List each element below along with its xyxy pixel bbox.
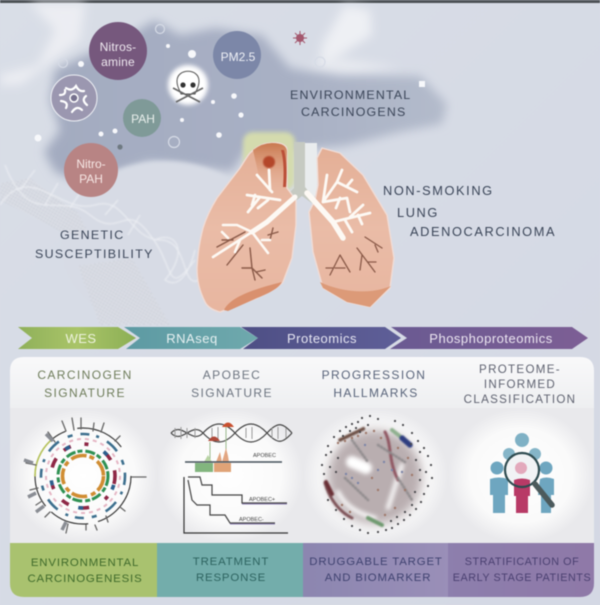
smoke wisps [0,3,400,85]
bronchi: white airways left [213,170,295,257]
dark particle [117,144,123,150]
right lung [307,148,394,307]
red spiky particle [293,31,307,45]
panel: APOBEC signature [157,357,303,597]
label: environmental carcinogenesis: CARCINOGENESIS [27,573,143,585]
heading: non-smoking lung adenocarcinoma: ADENOCARCINOMA [410,224,556,239]
heading: non-smoking lung adenocarcinoma: NON-SMOKING [383,183,494,198]
icon: microbe particle [51,75,97,121]
arrow: RNAseq: RNAseq [166,331,218,346]
heading: carcinogen signature [37,368,133,400]
trachea lumen [305,143,317,198]
heading: proteome-informed classification: CLASSIFICATION [464,393,576,406]
heading: carcinogen signature: SIGNATURE [44,386,126,400]
badge: Nitro-PAH: PAH [79,172,103,186]
heading: environmental carcinogens: CARCINOGENS [301,105,406,119]
label: environmental carcinogenesis [27,557,143,585]
label: druggable target and biomarker [309,556,443,584]
heading: progression hallmarks: PROGRESSION [322,368,426,382]
badge: PM2.5 [213,31,261,79]
heading: genetic susceptibility [35,228,154,261]
chart: survival curves [184,477,288,533]
heading: APOBEC signature [191,368,273,400]
lung lesion glow [243,132,295,190]
DNA double helix [0,165,200,325]
bronchi: brown branches left [217,228,278,280]
arrow: Phosphoproteomics: Phosphoproteomics [429,331,553,346]
top edge line [0,0,600,3]
heading: genetic susceptibility: GENETIC [60,228,125,242]
panel: carcinogen signature [10,357,157,597]
label: treatment response: RESPONSE [196,572,266,584]
heading: APOBEC signature: SIGNATURE [191,386,273,400]
heading: environmental carcinogens: ENVIRONMENTAL [290,88,411,102]
badge: PAH [123,99,161,137]
icon: skull and crossbones [168,65,208,105]
badge: Nitro-PAH: Nitro- [76,157,106,171]
badge: Nitrosamine: Nitros- [100,40,136,54]
heading: environmental carcinogens [290,88,411,119]
label: druggable target and biomarker: AND BIOMARKER [325,572,431,584]
badge: Nitro-PAH [64,143,118,197]
heading: progression hallmarks [322,368,426,400]
heading: carcinogen signature: CARCINOGEN [37,368,133,382]
label: treatment response: TREATMENT [193,556,269,568]
bronchi: brown branches right [326,237,382,275]
label: treatment response [193,556,269,584]
arrow: RNAseq [124,327,258,349]
icon: people under magnifier [490,433,554,513]
chart: circos plot [24,418,146,533]
heading: proteome-informed classification: INFORMED [484,378,556,391]
cloud lower glow arc [60,161,270,329]
chart: DNA helix with mutation tracks: APOBEC [253,453,276,459]
heading: APOBEC signature: APOBEC [203,368,261,382]
particle dots [34,44,425,142]
heading: genetic susceptibility: SUSCEPTIBILITY [35,247,154,261]
arrow: Phosphoproteomics [390,327,588,349]
label: stratification of early stage patients [453,556,591,584]
heading: proteome-informed classification [464,363,576,406]
panel: proteome-informed classification [448,357,594,597]
trachea [284,142,318,204]
label: stratification of early stage patients: STRATIFICATION OF [465,556,579,568]
badge: PAH: PAH [131,112,155,126]
panel: progression hallmarks [303,357,448,597]
badge: Nitrosamine: amine [101,55,135,69]
label: stratification of early stage patients: EARLY STAGE PATIENTS [453,572,591,584]
label: environmental carcinogenesis: ENVIRONMENTAL [31,557,139,569]
label: druggable target and biomarker: DRUGGABLE TARGET [309,556,443,568]
small ring particles [58,24,325,148]
badge: Nitrosamine [89,22,147,80]
bronchi: white airways right [307,170,370,238]
badge: PM2.5: PM2.5 [221,50,256,64]
cloud: environmental carcinogens [44,20,447,184]
arrow: WES: WES [65,331,97,346]
arrow: Proteomics [241,327,401,349]
heading: progression hallmarks: HALLMARKS [333,386,419,400]
arrow: WES [18,327,136,349]
arrow: Proteomics: Proteomics [287,331,357,346]
heading: non-smoking lung adenocarcinoma: LUNG [397,205,439,220]
chart: survival curves: APOBEC+ [249,497,275,503]
chart: protein network [322,416,432,533]
heading: proteome-informed classification: PROTEOME- [479,363,561,376]
chart: DNA helix with mutation tracks [171,422,292,472]
left lung [197,143,296,312]
chart: survival curves: APOBEC- [239,517,264,523]
heading: non-smoking lung adenocarcinoma [383,183,556,239]
